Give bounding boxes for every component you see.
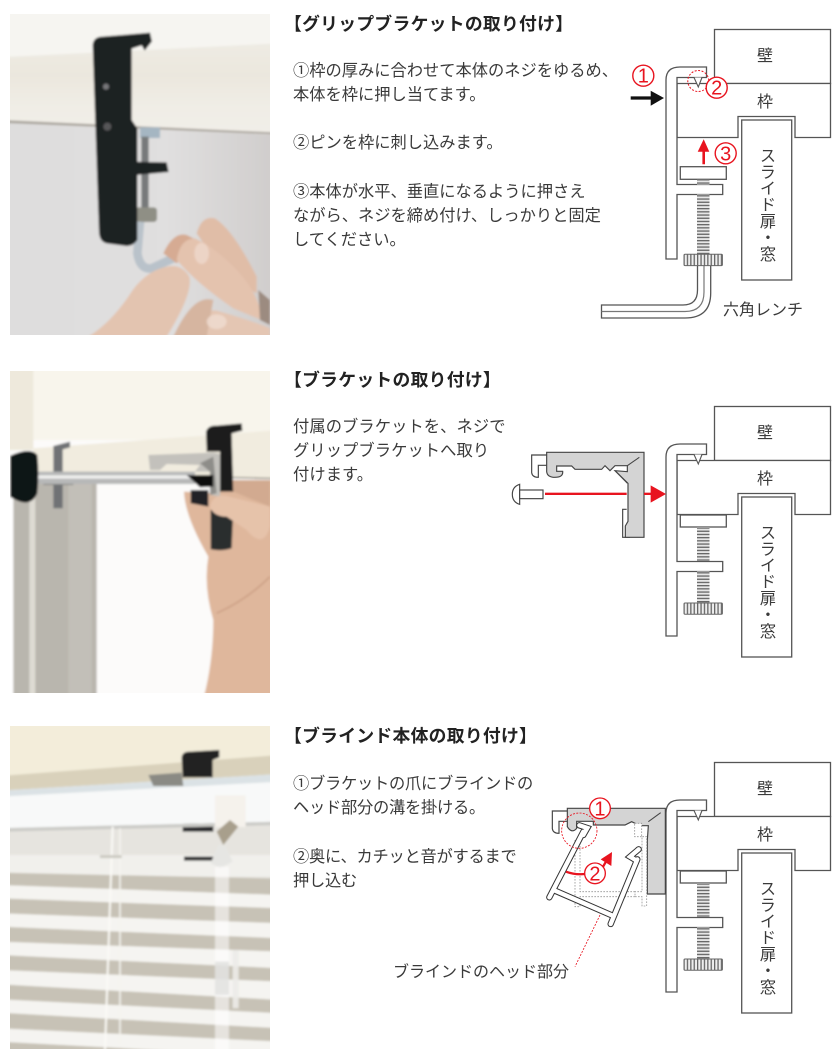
diagram: blind head attachment — [393, 762, 832, 1014]
wall — [714, 762, 830, 816]
door — [742, 853, 792, 1013]
text block: blind steps: ヘッド部分の溝を掛ける。 — [293, 799, 485, 817]
wrench label: 六角レンチ — [723, 301, 803, 319]
door: スライド扉・窓 — [757, 524, 776, 639]
small bracket with screw and arrow — [512, 452, 666, 537]
diagram: grip bracket cross-section with wrench — [600, 28, 832, 319]
bracket with blind head — [549, 798, 665, 967]
pin — [694, 810, 702, 820]
number 2 — [706, 77, 727, 100]
red arrow — [545, 485, 666, 503]
clamp plate — [680, 515, 726, 527]
gray body — [567, 808, 665, 894]
knob — [684, 959, 722, 970]
frame: 枠 — [757, 470, 773, 488]
clip — [552, 811, 567, 833]
red curve and arrow — [566, 859, 607, 874]
number 3 — [715, 143, 736, 165]
grip bracket — [666, 444, 723, 636]
dashed circle — [562, 813, 597, 848]
text block: blind steps: ②奥に、カチッと音がするまで — [293, 848, 517, 866]
knob — [684, 254, 722, 266]
wall — [714, 406, 830, 460]
photo: grip bracket being tightened with hex wrench — [10, 14, 270, 335]
number 3: 3 — [720, 143, 731, 165]
text block: blind steps: 押し込む — [293, 872, 357, 890]
dashed circle on pin — [688, 70, 709, 92]
frame — [677, 84, 830, 138]
text block: bracket step: 付けます。 — [293, 466, 373, 484]
pin — [694, 454, 702, 464]
gray body — [547, 452, 644, 537]
number 2: 2 — [711, 78, 722, 100]
number 1: 1 — [638, 66, 649, 88]
clamp plate — [680, 167, 726, 179]
arrowhead — [601, 852, 612, 866]
photo: attaching bracket with screwdriver — [10, 371, 270, 693]
text block: grip bracket steps: してください。 — [293, 231, 406, 249]
text block: bracket step: グリップブラケットへ取り — [293, 442, 489, 460]
clamp plate — [680, 871, 726, 883]
number 2: 2 — [589, 863, 601, 885]
number 1 — [590, 798, 610, 820]
heading: bracket: 【ブラケットの取り付け】 — [284, 370, 501, 390]
wall — [714, 30, 830, 84]
frame — [677, 460, 830, 514]
dashed leader — [575, 915, 600, 967]
number 2 — [585, 863, 605, 885]
screw part — [512, 484, 543, 504]
door — [742, 497, 792, 657]
tilted blind head — [549, 825, 639, 924]
ghost blind position — [575, 823, 647, 907]
screw — [697, 883, 710, 959]
text block: grip bracket steps: 本体を枠に押し当てます。 — [293, 86, 486, 104]
text block: grip bracket steps: ②ピンを枠に刺し込みます。 — [293, 134, 503, 152]
frame — [677, 816, 830, 870]
lower lip — [623, 509, 630, 537]
grip bracket — [666, 800, 723, 992]
text block: grip bracket steps: ③本体が水平、垂直になるように押さえ — [293, 183, 586, 201]
text block: grip bracket steps: ①枠の厚みに合わせて本体のネジをゆるめ、 — [293, 62, 618, 80]
door: スライド扉・窓 — [757, 147, 776, 262]
text block: bracket step — [293, 418, 506, 484]
knob — [684, 603, 722, 614]
text block: bracket step: 付属のブラケットを、ネジで — [293, 418, 506, 436]
number 1 — [633, 65, 654, 88]
door: スライド扉・窓 — [757, 880, 776, 995]
clip — [532, 455, 547, 477]
door — [742, 120, 792, 280]
pin — [694, 78, 702, 87]
text block: blind steps — [293, 774, 533, 890]
text block: blind steps: ①ブラケットの爪にブラインドの — [293, 775, 533, 793]
wrench — [602, 265, 711, 318]
wall: 壁 — [757, 47, 773, 65]
photo: blind head mounted — [10, 726, 270, 1049]
wall: 壁 — [757, 780, 773, 798]
screw — [697, 179, 710, 254]
bracket — [666, 67, 723, 259]
heading: blind body: 【ブラインド本体の取り付け】 — [284, 726, 537, 746]
text block: grip bracket steps — [293, 62, 618, 249]
wall: 壁 — [757, 424, 773, 442]
diagram: bracket attachment — [512, 406, 832, 658]
number 1: 1 — [594, 798, 606, 820]
red arrow up — [698, 139, 709, 164]
screw — [697, 527, 710, 603]
blind head label: ブラインドのヘッド部分 — [393, 962, 569, 981]
heading: grip bracket: 【グリップブラケットの取り付け】 — [284, 14, 573, 34]
text block: grip bracket steps: ながら、ネジを締め付け、しっかりと固定 — [293, 207, 601, 225]
frame: 枠 — [757, 93, 773, 111]
black arrow — [631, 91, 664, 106]
frame: 枠 — [757, 826, 773, 844]
